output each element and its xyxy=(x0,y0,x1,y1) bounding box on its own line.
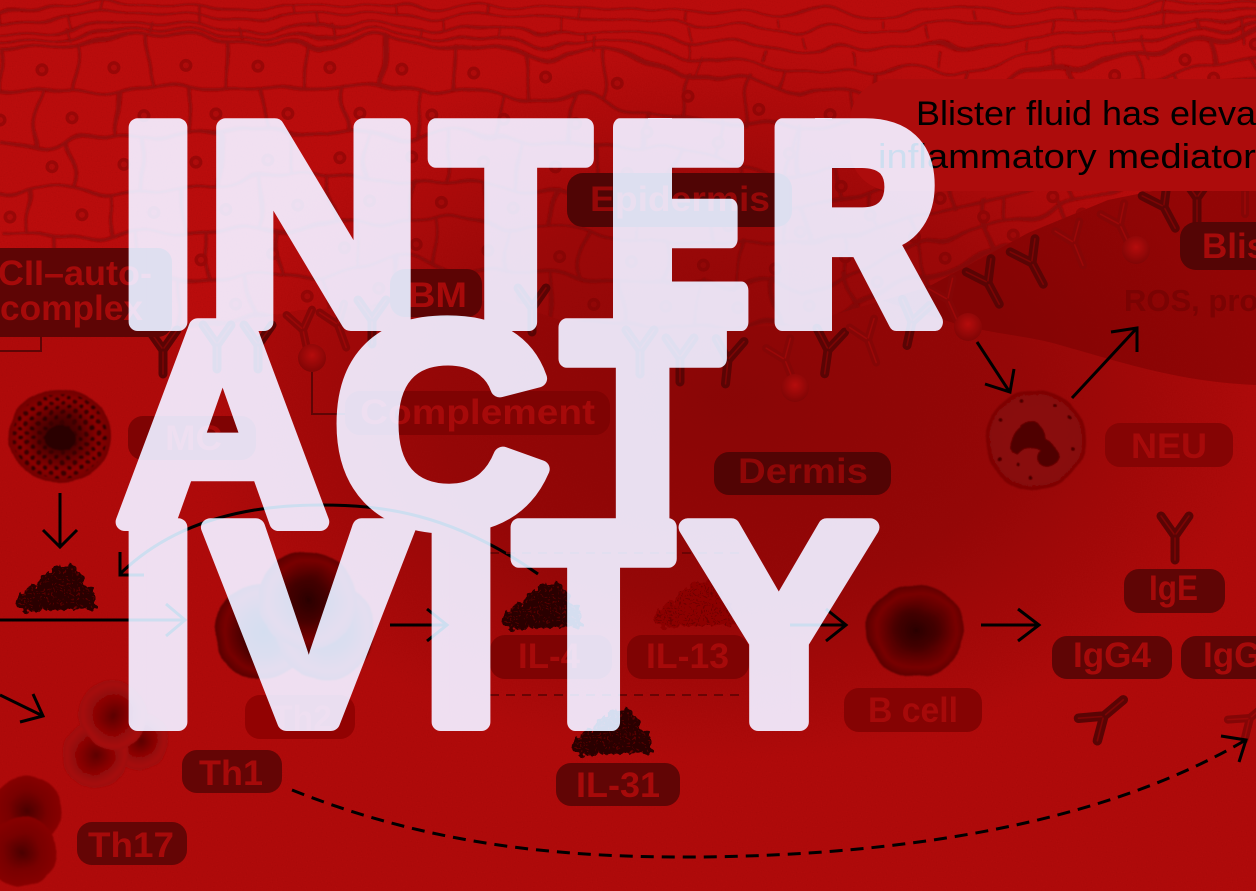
cell: Th2 cluster xyxy=(214,551,375,680)
label: Th17: Th17 xyxy=(88,826,174,865)
arrow: MC to cytokine xyxy=(43,493,77,547)
title: INTER ACT IVITY: R xyxy=(766,66,940,382)
title: INTER ACT IVITY: C xyxy=(334,266,548,582)
icon: IgG4 antibody xyxy=(1078,689,1133,741)
connector: autoantibody complex xyxy=(0,337,41,351)
label: IL-4 xyxy=(490,635,612,679)
title: INTER ACT IVITY: A xyxy=(118,266,328,582)
cell: mast cell xyxy=(9,389,111,483)
label: Th2 xyxy=(245,695,355,739)
label: IL-31 xyxy=(556,763,680,806)
label: Th2: Th2 xyxy=(272,699,332,738)
region: cytokine dashed box xyxy=(490,553,745,695)
cytokine cluster xyxy=(17,563,97,611)
label: IgG xyxy=(1181,636,1256,679)
title: INTER ACT IVITY: N xyxy=(206,66,421,382)
icon: IgG antibody faint xyxy=(1228,693,1256,740)
label: BM: BM xyxy=(408,276,467,315)
arrowhead: dashed Th1 to IgG xyxy=(1221,736,1246,762)
cell: B cell xyxy=(866,585,964,677)
title: INTER ACT IVITY: I xyxy=(422,466,500,782)
title: INTER ACT IVITY: V xyxy=(208,466,410,782)
cell: Th1 cluster xyxy=(62,681,169,788)
cell: Th17 cluster xyxy=(0,776,62,886)
arrow: cytokines to B cell xyxy=(790,609,846,641)
arrow: to Th1 cells xyxy=(0,694,43,722)
arrow: into neutrophil xyxy=(977,342,1014,392)
label: IL-13: IL-13 xyxy=(646,637,729,676)
label: autoantibody complex: complex xyxy=(0,289,144,328)
cell: neutrophil xyxy=(986,390,1086,490)
icon: IgE antibody xyxy=(1161,516,1189,560)
label: Dermis xyxy=(714,452,891,495)
label: IL-13 xyxy=(627,635,749,679)
arrow: input to Th2 xyxy=(0,604,185,636)
label: Th1 xyxy=(182,750,282,793)
arrow: out of neutrophil xyxy=(1072,328,1137,398)
label: Complement: Complement xyxy=(360,393,595,432)
label: BM xyxy=(390,269,482,317)
panel: epidermis cell layer xyxy=(0,0,1256,345)
label: Blister xyxy=(1180,222,1256,270)
label: MC xyxy=(128,416,256,460)
title: INTER ACT IVITY: I xyxy=(119,466,197,782)
cytokine cluster IL-4 xyxy=(503,581,583,629)
label: Th1: Th1 xyxy=(199,754,263,793)
label: Th17 xyxy=(77,822,187,865)
title: INTER ACT IVITY: E xyxy=(605,67,750,383)
label: autoantibody complex: CII–auto- xyxy=(0,254,152,293)
blister cavity xyxy=(880,150,1256,385)
label: IL-31: IL-31 xyxy=(576,766,660,805)
antibodies along the basement membrane xyxy=(149,172,1256,402)
title: INTER ACT IVITY: Y xyxy=(683,465,875,782)
arrow: arc from IL-4 back to cytokine cluster xyxy=(120,505,538,575)
label: IL-4: IL-4 xyxy=(518,637,581,676)
label: MC: MC xyxy=(165,419,222,458)
label: autoantibody complex xyxy=(0,248,172,337)
label: Epidermis: Epidermis xyxy=(590,180,770,219)
label: NEU xyxy=(1105,423,1233,467)
title: INTER ACT IVITY: T xyxy=(433,67,588,383)
title: INTER ACT IVITY: I xyxy=(119,66,197,382)
cytokine cluster IL-31 xyxy=(573,707,653,755)
label: IgE: IgE xyxy=(1149,569,1198,608)
arrow: dashed Th1 to IgG xyxy=(292,741,1244,857)
label: Epidermis xyxy=(567,173,792,227)
connector: complement xyxy=(312,372,345,414)
label: B cell xyxy=(844,688,982,732)
label: Dermis: Dermis xyxy=(738,452,868,491)
title: INTER ACT IVITY: T xyxy=(564,267,721,583)
label: IgG4: IgG4 xyxy=(1073,636,1152,675)
label: NEU: NEU xyxy=(1131,427,1207,466)
cytokine cluster IL-13 xyxy=(655,579,735,627)
arrow: Th2 to cytokines xyxy=(390,609,447,641)
label: IgE xyxy=(1124,569,1225,613)
title: INTER ACT IVITY xyxy=(118,66,940,783)
arrow: B cell to immunoglobulins xyxy=(981,609,1039,641)
callout: blister fluid xyxy=(850,79,1256,191)
label: B cell: B cell xyxy=(868,691,958,730)
title: INTER ACT IVITY: T xyxy=(516,467,671,783)
callout: blister fluid: inflammatory mediators xyxy=(878,138,1256,176)
label: IgG4 xyxy=(1052,636,1172,679)
